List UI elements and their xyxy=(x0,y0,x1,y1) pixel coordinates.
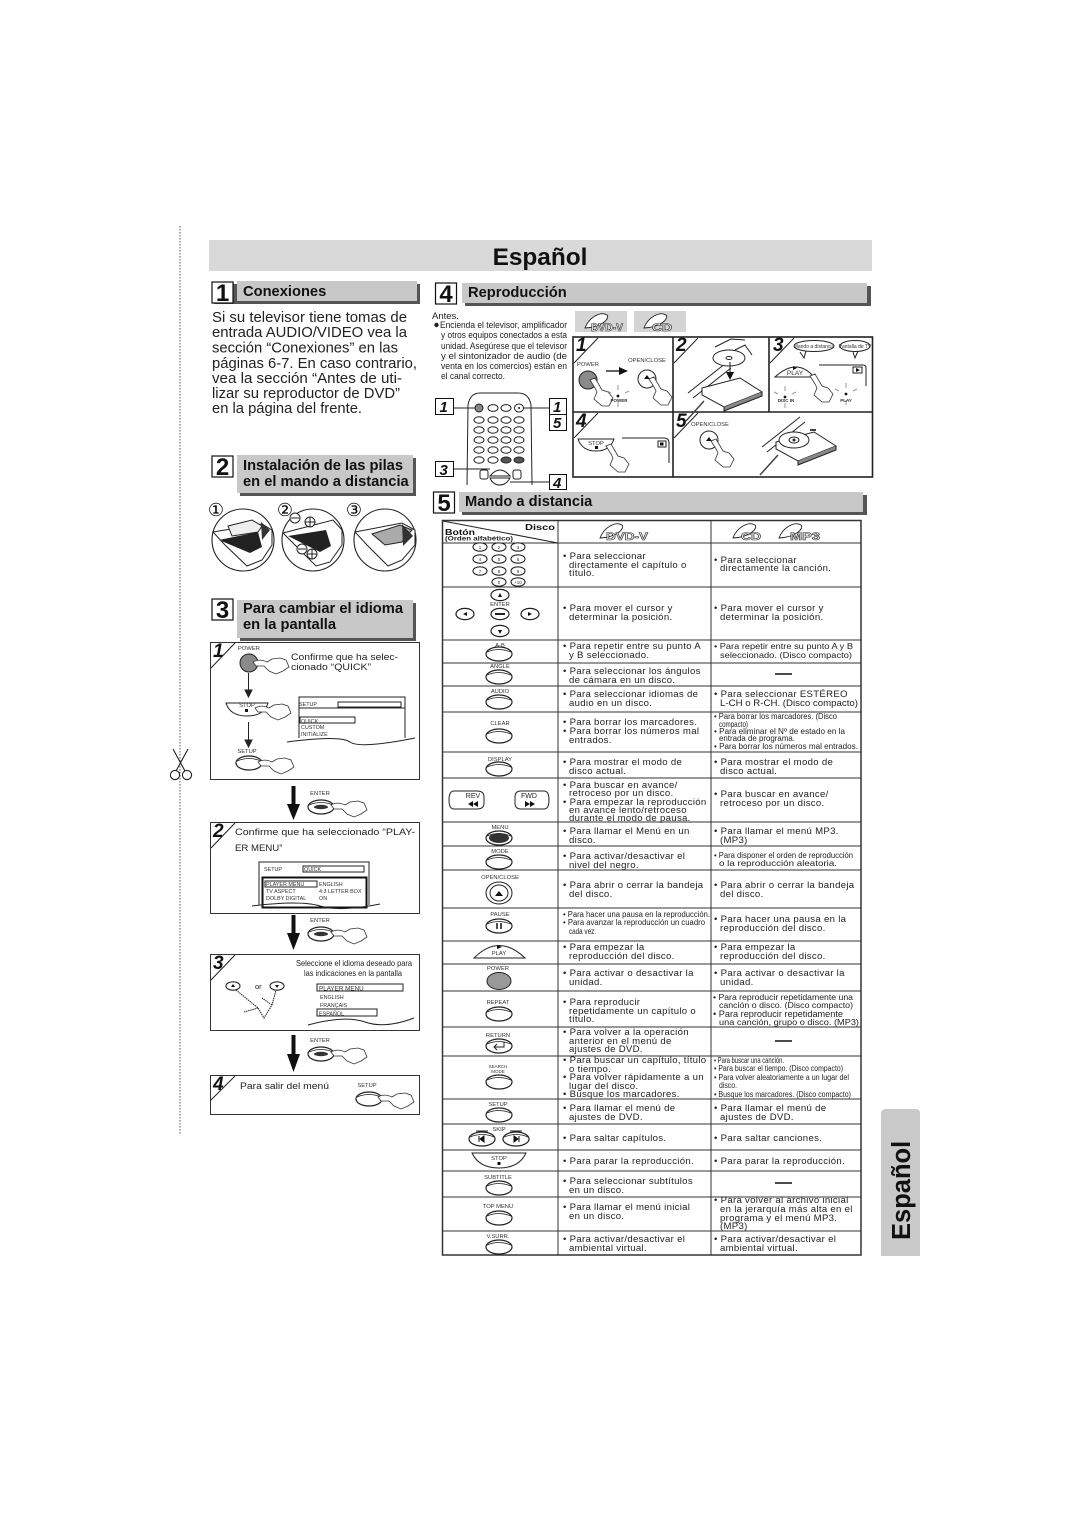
row: PAUSE: cada vez. xyxy=(569,927,596,936)
heading: 3 Para cambiar el idioma: 3 xyxy=(216,597,229,624)
row: CLEAR: • Para borrar los números mal xyxy=(563,726,699,737)
row: A-B xyxy=(486,641,853,661)
row: PLAY: PLAY xyxy=(492,951,506,957)
row: PAUSE: • Para hacer una pausa en la xyxy=(714,914,847,925)
row: OPEN/CLOSE xyxy=(481,875,855,904)
step 3 playback xyxy=(770,335,872,408)
row: ANGLE: de cámara en un disco. xyxy=(569,675,675,686)
row: SEARCH MODE: • Busque los marcadores. xyxy=(563,1089,680,1100)
row: PAUSE: reproducción del disco. xyxy=(720,923,826,934)
row: STOP: STOP xyxy=(491,1156,507,1162)
row: REV FWD: FWD xyxy=(521,793,537,800)
row: POWER: • Para activar o desactivar la xyxy=(563,968,694,979)
icon: scissors xyxy=(170,749,192,780)
row: REPEAT: REPEAT xyxy=(487,1000,510,1006)
row: REV FWD: • Para buscar en avance/ xyxy=(714,789,829,800)
row: REV FWD: durante el modo de pausa. xyxy=(569,813,691,824)
heading: 4 Reproducción: 4 xyxy=(439,281,453,308)
row: cursor keys: • Para mover el cursor y xyxy=(714,603,824,614)
heading: 3 Para cambiar el idioma xyxy=(212,597,416,641)
row: REPEAT: • Para reproducir xyxy=(563,997,641,1008)
row: PLAY: • Para empezar la xyxy=(563,942,645,953)
side tab: Español xyxy=(888,1141,916,1240)
row: V.SURR.: ambiental virtual. xyxy=(569,1243,647,1254)
row: REPEAT: repetidamente un capítulo o xyxy=(569,1006,696,1017)
table header xyxy=(443,521,820,543)
table header: MP3 xyxy=(790,531,820,543)
row: number keys: 2 xyxy=(498,545,501,550)
text: antes: el canal correcto. xyxy=(441,371,505,381)
row: SUBTITLE: en un disco. xyxy=(569,1185,624,1196)
text: conexiones body: lizar su reproductor de DVD” xyxy=(212,385,400,402)
row: V.SURR.: • Para activar/desactivar el xyxy=(714,1234,836,1245)
row: number keys: 7 xyxy=(479,569,482,574)
table: remote functions xyxy=(442,520,861,1255)
row: number keys: 6 xyxy=(517,557,520,562)
panel: step 2 language: SETUP xyxy=(264,867,282,873)
row: REPEAT: canción o disco. (Disco compacto) xyxy=(719,1000,853,1010)
row: MENU: disco. xyxy=(569,835,596,846)
table grid xyxy=(442,520,861,1255)
row: V.SURR.: • Para activar/desactivar el xyxy=(563,1234,685,1245)
panel: step 2 language: QUICK xyxy=(304,867,321,873)
row: MODE: • Para disponer el orden de reproducción xyxy=(714,851,853,860)
text: antes: y el sintonizador de audio (de xyxy=(441,351,567,361)
title: Español xyxy=(493,244,587,271)
row: REV FWD: retroceso por un disco. xyxy=(720,798,824,809)
row: MODE: MODE xyxy=(491,849,509,855)
row: PLAY: • Para empezar la xyxy=(714,942,796,953)
panel: step 4 language: Para salir del menú xyxy=(240,1081,329,1091)
table header: CD xyxy=(741,531,761,543)
heading: 5 Mando a distancia: 5 xyxy=(437,490,451,517)
enter button 2: ENTER xyxy=(310,918,330,924)
row: REV FWD xyxy=(449,780,829,824)
step 5 playback xyxy=(674,411,836,475)
table header: Botón xyxy=(445,527,475,537)
panel: step 4 language xyxy=(210,1074,420,1114)
row: OPEN/CLOSE: • Para abrir o cerrar la bandeja xyxy=(714,880,855,891)
row: cursor keys: determinar la posición. xyxy=(720,612,823,623)
text: antes: y otros equipos conectados a esta xyxy=(441,330,568,340)
row: CLEAR: CLEAR xyxy=(490,721,510,727)
row: TOP MENU xyxy=(483,1195,853,1232)
row: STOP: • Para parar la reproducción. xyxy=(563,1156,694,1167)
disc logos xyxy=(575,311,686,334)
row: number keys: 1 xyxy=(479,545,482,550)
step 3 playback: Mando a distancia xyxy=(794,344,835,350)
row: number keys: 9 xyxy=(517,569,520,574)
row: OPEN/CLOSE: • Para abrir o cerrar la bandeja xyxy=(563,880,704,891)
battery step 1 xyxy=(208,500,274,571)
step 1 playback: 1 xyxy=(576,335,587,356)
row: SEARCH MODE xyxy=(486,1055,851,1100)
battery step 1: ① xyxy=(208,500,224,520)
panel: step 2 language: PLAYER MENU xyxy=(266,882,304,888)
row: DISPLAY: disco actual. xyxy=(720,766,777,777)
step 5 playback: OPEN/CLOSE xyxy=(691,422,729,428)
row: V.SURR. xyxy=(486,1234,836,1254)
row: A-B: seleccionado. (Disco compacto) xyxy=(720,650,852,660)
row: AUDIO xyxy=(486,689,858,709)
callouts: remote labels: 1 xyxy=(553,399,561,416)
arrow: to step 2 xyxy=(287,786,300,820)
row: SEARCH MODE: MODE xyxy=(491,1069,505,1074)
heading: 5 Mando a distancia: Mando a distancia xyxy=(465,494,593,510)
row: AUDIO: L-CH o R-CH. (Disco compacto) xyxy=(720,698,858,709)
heading: 3 Para cambiar el idioma: en la pantalla xyxy=(243,617,337,633)
heading: 1 Conexiones: 1 xyxy=(216,280,229,307)
row: REV FWD: • Para buscar en avance/ xyxy=(563,780,678,791)
step 4 playback: 4 xyxy=(575,411,587,432)
row: CLEAR xyxy=(486,712,858,751)
disc logos: CD xyxy=(652,322,672,334)
row: TOP MENU: en la jerarquía más alta en el xyxy=(720,1204,853,1215)
row: PAUSE xyxy=(486,910,847,936)
row: REPEAT xyxy=(486,992,859,1027)
row: AUDIO: audio en un disco. xyxy=(569,698,652,709)
panel: step 1 language: SETUP xyxy=(299,702,317,708)
row: number keys: 5 xyxy=(498,557,501,562)
enter button 3: ENTER xyxy=(310,1038,330,1044)
row: number keys: • Para seleccionar xyxy=(714,555,797,566)
row: STOP: • Para parar la reproducción. xyxy=(714,1156,845,1167)
panel: step 2 language: 4:3 LETTER BOX xyxy=(319,889,362,895)
row: SEARCH MODE: disco. xyxy=(719,1081,737,1090)
row: cursor keys: • Para mover el cursor y xyxy=(563,603,673,614)
row: DISPLAY: DISPLAY xyxy=(488,757,512,763)
row: TOP MENU: (MP3) xyxy=(720,1221,748,1232)
row: POWER: unidad. xyxy=(569,977,603,988)
battery step 3 xyxy=(346,500,416,571)
enter button 1 xyxy=(308,791,367,817)
row: PLAY: reproducción del disco. xyxy=(720,951,826,962)
row: SEARCH MODE: • Para volver rápidamente a un xyxy=(563,1072,704,1083)
panel: step 2 language: TV ASPECT xyxy=(266,889,296,895)
title xyxy=(209,240,872,271)
row: SEARCH MODE: • Para buscar un capítulo, título xyxy=(563,1055,706,1066)
row: A-B: A-B xyxy=(495,643,505,649)
row: ANGLE xyxy=(486,664,792,686)
heading: 2 Instalación de las pilas: 2 xyxy=(216,454,229,481)
step 2 playback: 2 xyxy=(675,335,687,356)
row: V.SURR.: ambiental virtual. xyxy=(720,1243,798,1254)
row: AUDIO: • Para seleccionar idiomas de xyxy=(563,689,698,700)
row: V.SURR.: V.SURR. xyxy=(487,1234,510,1240)
panel: step 2 language: Confirme que ha seleccionado “PLAY- xyxy=(235,827,415,838)
callouts: remote labels: 1 xyxy=(440,399,448,416)
row: number keys: 0 xyxy=(498,580,501,585)
row: SEARCH MODE: • Busque los marcadores. (Disco compacto) xyxy=(714,1090,851,1099)
arrow: to step 4 xyxy=(287,1035,300,1072)
row: MODE: nivel del negro. xyxy=(569,860,639,871)
text: conexiones body: entrada AUDIO/VIDEO vea la xyxy=(212,324,408,341)
row: PAUSE: • Para avanzar la reproducción un cuadro xyxy=(563,918,706,927)
heading: 3 Para cambiar el idioma: Para cambiar el idioma xyxy=(243,601,404,617)
row: number keys: 3 xyxy=(517,545,520,550)
panel: step 1 language xyxy=(210,641,420,780)
row: number keys: +10 xyxy=(514,580,522,585)
panel: step 1 language: 1 xyxy=(213,641,224,662)
step 1 playback xyxy=(574,335,672,407)
row: SETUP: • Para llamar el menú de xyxy=(714,1103,826,1114)
row: DISPLAY xyxy=(486,757,833,777)
row: SKIP xyxy=(469,1127,822,1146)
panel: step 3 language: las indicaciones en la pantalla xyxy=(304,968,402,978)
battery step 2: ② xyxy=(277,500,293,520)
row: REV FWD: retroceso por un disco. xyxy=(569,788,674,799)
enter button 2 xyxy=(308,918,367,944)
cut line xyxy=(179,226,181,1135)
row: REV FWD: • Para empezar la reproducción xyxy=(563,797,707,808)
row: SEARCH MODE: • Para buscar una canción. xyxy=(714,1056,784,1065)
row: SUBTITLE xyxy=(484,1175,792,1196)
row: SETUP: ajustes de DVD. xyxy=(720,1112,794,1123)
row: OPEN/CLOSE: del disco. xyxy=(720,889,764,900)
step 3 playback: Pantalla de TV xyxy=(839,344,872,350)
row: TOP MENU: • Para volver al archivo inicial xyxy=(714,1195,849,1206)
text: conexiones body: páginas 6-7. En caso contrario, xyxy=(212,355,417,372)
row: number keys: 8 xyxy=(498,569,501,574)
step 3 playback: PLAY xyxy=(840,398,852,403)
text: antes: venta en los comercios) están en xyxy=(441,361,567,371)
row: REPEAT: una canción, grupo o disco. (MP3) xyxy=(719,1017,859,1027)
row: TOP MENU: programa y el menú MP3. xyxy=(720,1213,837,1224)
row: SKIP: • Para saltar canciones. xyxy=(714,1133,822,1144)
row: PAUSE: • Para hacer una pausa en la reproducción. xyxy=(563,910,710,919)
row: MODE xyxy=(486,849,853,871)
row: REV FWD: REV xyxy=(466,793,481,800)
heading: 2 Instalación de las pilas: en el mando a distancia xyxy=(243,474,410,490)
panel: step 1 language: POWER xyxy=(238,646,260,652)
row: CLEAR: • Para eliminar el Nº de estado en la xyxy=(714,727,846,736)
panel: playback steps xyxy=(573,335,872,477)
row: TOP MENU: TOP MENU xyxy=(483,1204,513,1210)
text: conexiones body xyxy=(212,309,417,417)
row: REPEAT: título. xyxy=(569,1014,595,1025)
heading: 2 Instalación de las pilas xyxy=(212,454,416,496)
row: POWER: unidad. xyxy=(720,977,754,988)
enter button 1: ENTER xyxy=(310,791,330,797)
text: antes: Antes. xyxy=(432,311,459,322)
row: MODE: • Para activar/desactivar el xyxy=(563,851,685,862)
arrow: to step 3 xyxy=(287,915,300,950)
row: SKIP: • Para saltar capítulos. xyxy=(563,1133,666,1144)
row: POWER xyxy=(487,966,845,990)
row: RETURN: RETURN xyxy=(486,1033,510,1039)
row: SEARCH MODE: SEARCH xyxy=(489,1064,507,1069)
panel: step 3 language: 3 xyxy=(213,953,224,974)
panel: step 3 language: ESPAÑOL xyxy=(319,1010,344,1018)
row: MENU xyxy=(486,825,839,846)
row: AUDIO: AUDIO xyxy=(491,689,510,695)
step 3 playback: 3 xyxy=(773,335,784,356)
row: DISPLAY: • Para mostrar el modo de xyxy=(563,757,682,768)
panel: step 1 language: STOP xyxy=(239,703,255,709)
row: MODE: o la reproducción aleatoria. xyxy=(719,859,837,868)
panel: step 3 language: ENGLISH xyxy=(320,995,344,1001)
row: RETURN: ajustes de DVD. xyxy=(569,1044,643,1055)
row: CLEAR: entrada de programa. xyxy=(719,734,795,743)
panel: step 3 language: Seleccione el idioma deseado para xyxy=(296,958,412,968)
row: MENU: (MP3) xyxy=(720,835,748,846)
row: DISPLAY: • Para mostrar el modo de xyxy=(714,757,833,768)
panel: step 3 language: PLAYER MENU xyxy=(319,986,364,992)
step 3 playback: DISC IN xyxy=(778,398,794,403)
row: OPEN/CLOSE: OPEN/CLOSE xyxy=(481,875,519,881)
step 2 playback xyxy=(674,335,762,421)
text: conexiones body: en la página del frente. xyxy=(212,400,362,417)
row: SKIP: SKIP xyxy=(492,1127,506,1133)
row: SEARCH MODE: • Para volver aleatoriamente a un lugar del xyxy=(714,1073,849,1082)
row: DISPLAY: disco actual. xyxy=(569,766,626,777)
row: SETUP: ajustes de DVD. xyxy=(569,1112,643,1123)
table header: (Orden alfabético) xyxy=(445,536,513,542)
row: number keys: título. xyxy=(569,568,595,579)
row: cursor keys xyxy=(456,589,824,637)
remote control xyxy=(467,393,532,485)
callouts: remote labels: 5 xyxy=(553,415,562,432)
row: number keys: 4 xyxy=(479,557,482,562)
row: OPEN/CLOSE: del disco. xyxy=(569,889,613,900)
row: A-B: • Para repetir entre su punto A y B xyxy=(714,641,853,651)
panel: step 2 language: ON xyxy=(319,896,327,902)
text: conexiones body: vea la sección “Antes de uti- xyxy=(212,370,402,387)
enter button 3 xyxy=(308,1038,367,1064)
row: REPEAT: • Para reproducir repetidamente xyxy=(713,1009,843,1019)
callouts: remote labels: 3 xyxy=(440,462,448,479)
heading: 4 Reproducción xyxy=(436,281,871,308)
panel: step 2 language: DOLBY DIGITAL xyxy=(266,896,306,902)
text: antes xyxy=(432,311,568,381)
panel: step 4 language: SETUP xyxy=(357,1083,377,1089)
heading: 5 Mando a distancia xyxy=(434,490,867,517)
step 1 playback: POWER xyxy=(610,398,628,403)
step 4 playback xyxy=(574,411,669,472)
heading: 1 Conexiones xyxy=(212,280,420,307)
callouts: remote labels: 4 xyxy=(552,475,562,492)
panel: step 1 language: SETUP xyxy=(237,749,257,755)
row: REV FWD: en avance lento/retroceso xyxy=(569,805,687,816)
disc logos: DVD-V xyxy=(591,322,624,334)
row: MENU: • Para llamar el Menú en un xyxy=(563,826,690,837)
row: SUBTITLE: SUBTITLE xyxy=(484,1175,512,1181)
row: POWER: • Para activar o desactivar la xyxy=(714,968,845,979)
row: PAUSE: PAUSE xyxy=(490,912,510,918)
row: STOP xyxy=(472,1153,845,1168)
step 1 playback: POWER xyxy=(577,362,599,368)
panel: step 4 language: 4 xyxy=(212,1074,224,1095)
heading: 4 Reproducción: Reproducción xyxy=(468,285,567,301)
row: POWER: POWER xyxy=(487,966,509,972)
row: CLEAR: compacto) xyxy=(719,720,748,729)
table header: DVD-V xyxy=(606,531,649,543)
side tab xyxy=(881,1109,920,1256)
row: RETURN: anterior en el menú de xyxy=(569,1036,672,1047)
row: PLAY xyxy=(474,942,826,962)
panel: step 2 language: ENGLISH xyxy=(319,882,343,888)
row: cursor keys: ENTER xyxy=(490,602,510,608)
row: RETURN xyxy=(486,1027,792,1055)
row: MENU: MENU xyxy=(491,825,509,831)
text: antes: unidad. Asegúrese que el televisor xyxy=(441,341,567,351)
row: ANGLE: ANGLE xyxy=(490,664,510,670)
row: RETURN: • Para volver a la operación xyxy=(563,1027,689,1038)
row: REPEAT: • Para reproducir repetidamente una xyxy=(713,992,853,1002)
row: CLEAR: • Para borrar los marcadores. (Disco xyxy=(714,712,838,721)
callouts: remote labels xyxy=(436,398,566,492)
panel: step 3 language xyxy=(210,953,420,1030)
row: number keys xyxy=(473,543,831,586)
table header: Disco xyxy=(525,522,555,532)
panel: step 1 language: QUICK xyxy=(301,719,318,725)
panel: step 2 language xyxy=(210,821,420,914)
row: SEARCH MODE: lugar del disco. xyxy=(569,1081,638,1092)
row: SEARCH MODE: • Para buscar el tiempo. (Disco compacto) xyxy=(714,1064,843,1073)
panel: step 2 language: ER MENU” xyxy=(235,843,282,854)
panel: step 2 language: 2 xyxy=(212,821,224,842)
battery step 2 xyxy=(277,500,344,571)
row: cursor keys: determinar la posición. xyxy=(569,612,672,623)
row: A-B: • Para repetir entre su punto A xyxy=(563,641,701,652)
row: A-B: y B seleccionado. xyxy=(569,650,649,661)
heading: 2 Instalación de las pilas: Instalación de las pilas xyxy=(243,458,403,474)
panel: step 1 language: cionado “QUICK” xyxy=(291,662,371,673)
text: conexiones body: sección “Conexiones” en las xyxy=(212,340,398,356)
row: SETUP: SETUP xyxy=(488,1102,508,1108)
step 3 playback: PLAY xyxy=(787,370,804,377)
step 5 playback: 5 xyxy=(676,411,687,432)
panel: step 1 language: Confirme que ha selec- xyxy=(291,652,398,663)
text: antes: Encienda el televisor, amplificador xyxy=(440,320,567,330)
panel: step 3 language: or xyxy=(255,982,262,991)
row: MENU: • Para llamar el menú MP3. xyxy=(714,826,839,837)
text: conexiones body: Si su televisor tiene tomas de xyxy=(212,309,407,326)
heading: 1 Conexiones: Conexiones xyxy=(243,284,326,300)
row: SETUP xyxy=(486,1102,826,1123)
row: ANGLE: • Para seleccionar los ángulos xyxy=(563,666,701,677)
row: CLEAR: • Para borrar los marcadores. xyxy=(563,717,697,728)
row: SEARCH MODE: o tiempo. xyxy=(569,1064,611,1075)
row: number keys: directamente la canción. xyxy=(720,563,831,574)
panel: step 1 language: INITIALIZE xyxy=(301,732,328,738)
row: PLAY: reproducción del disco. xyxy=(569,951,675,962)
battery step 3: ③ xyxy=(346,500,362,520)
panel: step 3 language: FRANÇAIS xyxy=(320,1003,348,1009)
row: SUBTITLE: • Para seleccionar subtítulos xyxy=(563,1176,693,1187)
row: number keys: directamente el capítulo o xyxy=(569,560,687,571)
row: CLEAR: • Para borrar los números mal entrados. xyxy=(714,742,858,751)
step 4 playback: STOP xyxy=(588,441,604,447)
row: number keys: • Para seleccionar xyxy=(563,551,646,562)
row: AUDIO: • Para seleccionar ESTÉREO xyxy=(714,689,848,700)
step 1 playback: OPEN/CLOSE xyxy=(628,358,666,364)
row: TOP MENU: • Para llamar el menú inicial xyxy=(563,1202,690,1213)
row: SETUP: • Para llamar el menú de xyxy=(563,1103,675,1114)
row: CLEAR: entrados. xyxy=(569,735,612,746)
panel: step 1 language: CUSTOM xyxy=(301,725,325,731)
row: TOP MENU: en un disco. xyxy=(569,1211,624,1222)
